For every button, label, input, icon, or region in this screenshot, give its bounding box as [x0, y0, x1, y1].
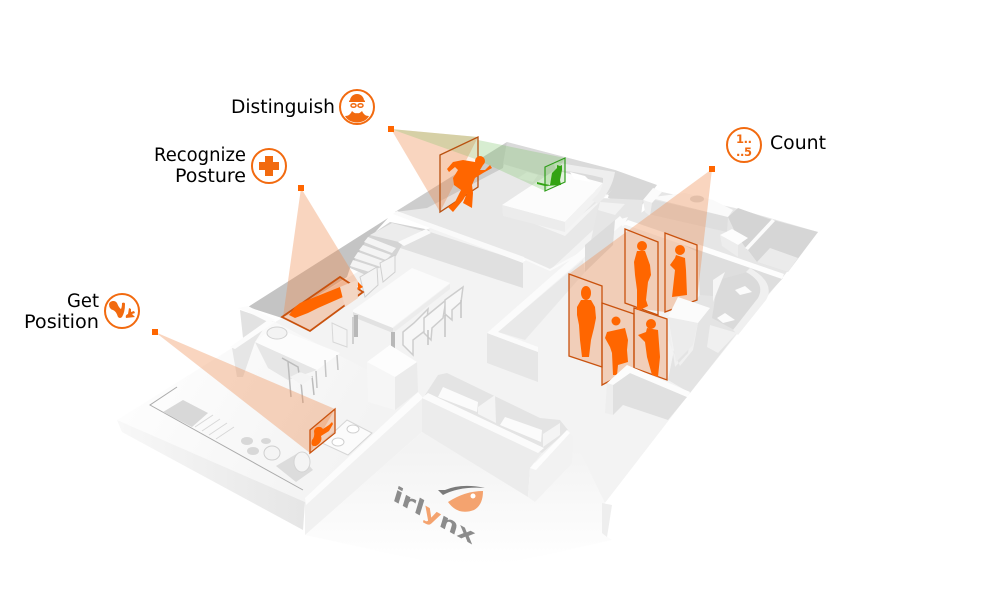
beam: position	[155, 332, 335, 453]
right room floor	[668, 295, 763, 393]
frame and figure: get position	[310, 409, 335, 453]
counter	[643, 188, 733, 232]
right room back wall face	[640, 224, 783, 305]
label: Distinguish: Distinguish	[231, 97, 335, 118]
kitchen floor	[117, 322, 422, 502]
nightstand	[518, 172, 538, 182]
stairs	[350, 222, 431, 276]
storage block	[367, 345, 418, 410]
closets	[720, 208, 818, 272]
beam: count	[569, 169, 712, 314]
sensor dot: distinguish	[388, 126, 394, 132]
bedroom floor	[395, 160, 620, 270]
label: Count: Count	[770, 133, 826, 154]
floor plan	[117, 142, 818, 565]
kitchen outer face	[117, 420, 305, 530]
main floor	[232, 215, 783, 503]
icon: count: 1..	[736, 132, 752, 146]
north side corridor floor	[625, 190, 818, 277]
divider wall	[393, 211, 524, 288]
dining set	[332, 255, 463, 355]
bed	[502, 162, 625, 236]
icon: count	[727, 128, 761, 162]
front stub wall	[605, 365, 690, 420]
beam: distinguish	[391, 129, 478, 212]
icon: position figures	[105, 294, 139, 328]
sensor dot: position	[152, 329, 158, 335]
beam: cat overlap	[391, 129, 478, 160]
kitchen counter	[150, 387, 372, 490]
lounge with wall and sofas	[422, 373, 573, 502]
rug edge	[523, 248, 590, 270]
icon: medical cross	[252, 149, 286, 183]
beam: cat in green	[478, 140, 565, 191]
frame and figure: cat	[537, 158, 565, 191]
floor beside bed	[590, 198, 643, 245]
L wall	[487, 216, 628, 382]
bedroom back wall	[503, 142, 615, 196]
sensor dot: count	[709, 166, 715, 172]
sensor dot: posture	[298, 185, 304, 191]
sofa	[707, 268, 769, 353]
frame and figure: distinguish burglar	[440, 137, 492, 212]
lower right exterior wall	[602, 393, 700, 537]
south room floor	[305, 432, 612, 565]
label: Recognize Posture: Posture	[175, 166, 246, 187]
icon: masked face	[340, 90, 374, 124]
label: Get Position: Position	[24, 312, 99, 333]
logo: irlynx: irlynx	[391, 482, 479, 550]
icon: count: ..5	[736, 145, 752, 159]
outer wall top	[305, 392, 423, 505]
armchair	[668, 297, 710, 367]
beam: posture	[283, 188, 360, 317]
outer wall inner face	[305, 398, 422, 535]
label: Get Position: Get	[67, 291, 99, 312]
label: Get Position	[24, 291, 99, 333]
bedroom left wall	[395, 142, 507, 212]
wall section by bed	[608, 170, 657, 205]
label: Recognize Posture: Recognize	[154, 145, 246, 166]
kitchen table and wall stubs	[230, 306, 340, 403]
stair side back wall	[248, 218, 388, 318]
label: Recognize Posture	[154, 145, 246, 187]
frames and figures: count	[569, 229, 697, 385]
long wall top	[623, 220, 784, 279]
frame and figure: recognize posture	[282, 277, 363, 331]
